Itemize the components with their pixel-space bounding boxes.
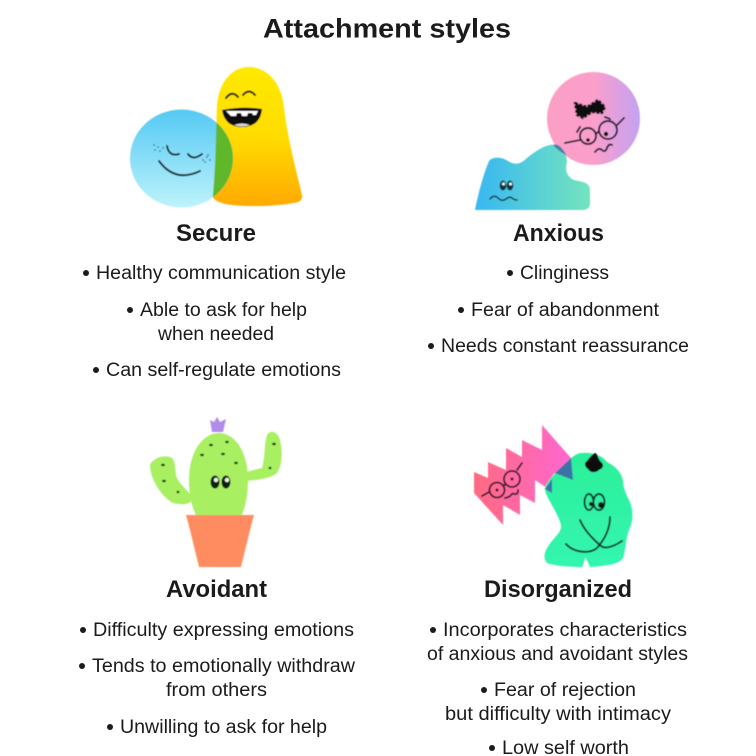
heading: secure: Secure <box>176 220 256 247</box>
bullet list: disorganized: Incorporates characteristics <box>443 620 687 641</box>
bullet list: secure: Able to ask for help <box>140 300 307 321</box>
bullet list: secure: when needed <box>157 324 274 345</box>
panel: avoidant <box>79 417 355 738</box>
panel: anxious <box>428 72 689 357</box>
bullet list: secure <box>83 263 346 381</box>
bullet list: disorganized: Fear of rejection <box>494 680 636 701</box>
bullet list: avoidant: Unwilling to ask for help <box>120 717 327 738</box>
heading: anxious: Anxious <box>513 220 604 247</box>
bullet list: anxious <box>428 263 689 357</box>
bullet list: disorganized: of anxious and avoidant styles <box>427 644 688 665</box>
bullet list: disorganized: but difficulty with intimacy <box>445 704 672 725</box>
bullet list: avoidant: from others <box>166 680 267 701</box>
panel: secure <box>83 67 346 381</box>
bullet list: anxious: Needs constant reassurance <box>441 336 689 357</box>
bullet list: disorganized <box>427 620 688 756</box>
panel: disorganized <box>427 425 688 756</box>
bullet list: anxious: Clinginess <box>520 263 609 284</box>
bullet list: secure: Healthy communication style <box>96 263 346 284</box>
illustration: pink circle and blue blob <box>475 72 640 210</box>
bullet list: anxious: Fear of abandonment <box>471 300 660 321</box>
illustration: blue circle and yellow character <box>130 67 302 208</box>
heading: avoidant: Avoidant <box>166 576 267 603</box>
bullet list: avoidant: Difficulty expressing emotions <box>93 620 354 641</box>
heading: disorganized: Disorganized <box>484 576 632 603</box>
bullet list: avoidant <box>79 620 355 738</box>
bullet list: secure: Can self-regulate emotions <box>106 360 341 381</box>
title: Attachment styles <box>263 14 511 44</box>
illustration: pink zigzag and green blob <box>474 425 632 567</box>
illustration: cactus in pot <box>150 417 282 567</box>
bullet list: avoidant: Tends to emotionally withdraw <box>92 656 355 677</box>
